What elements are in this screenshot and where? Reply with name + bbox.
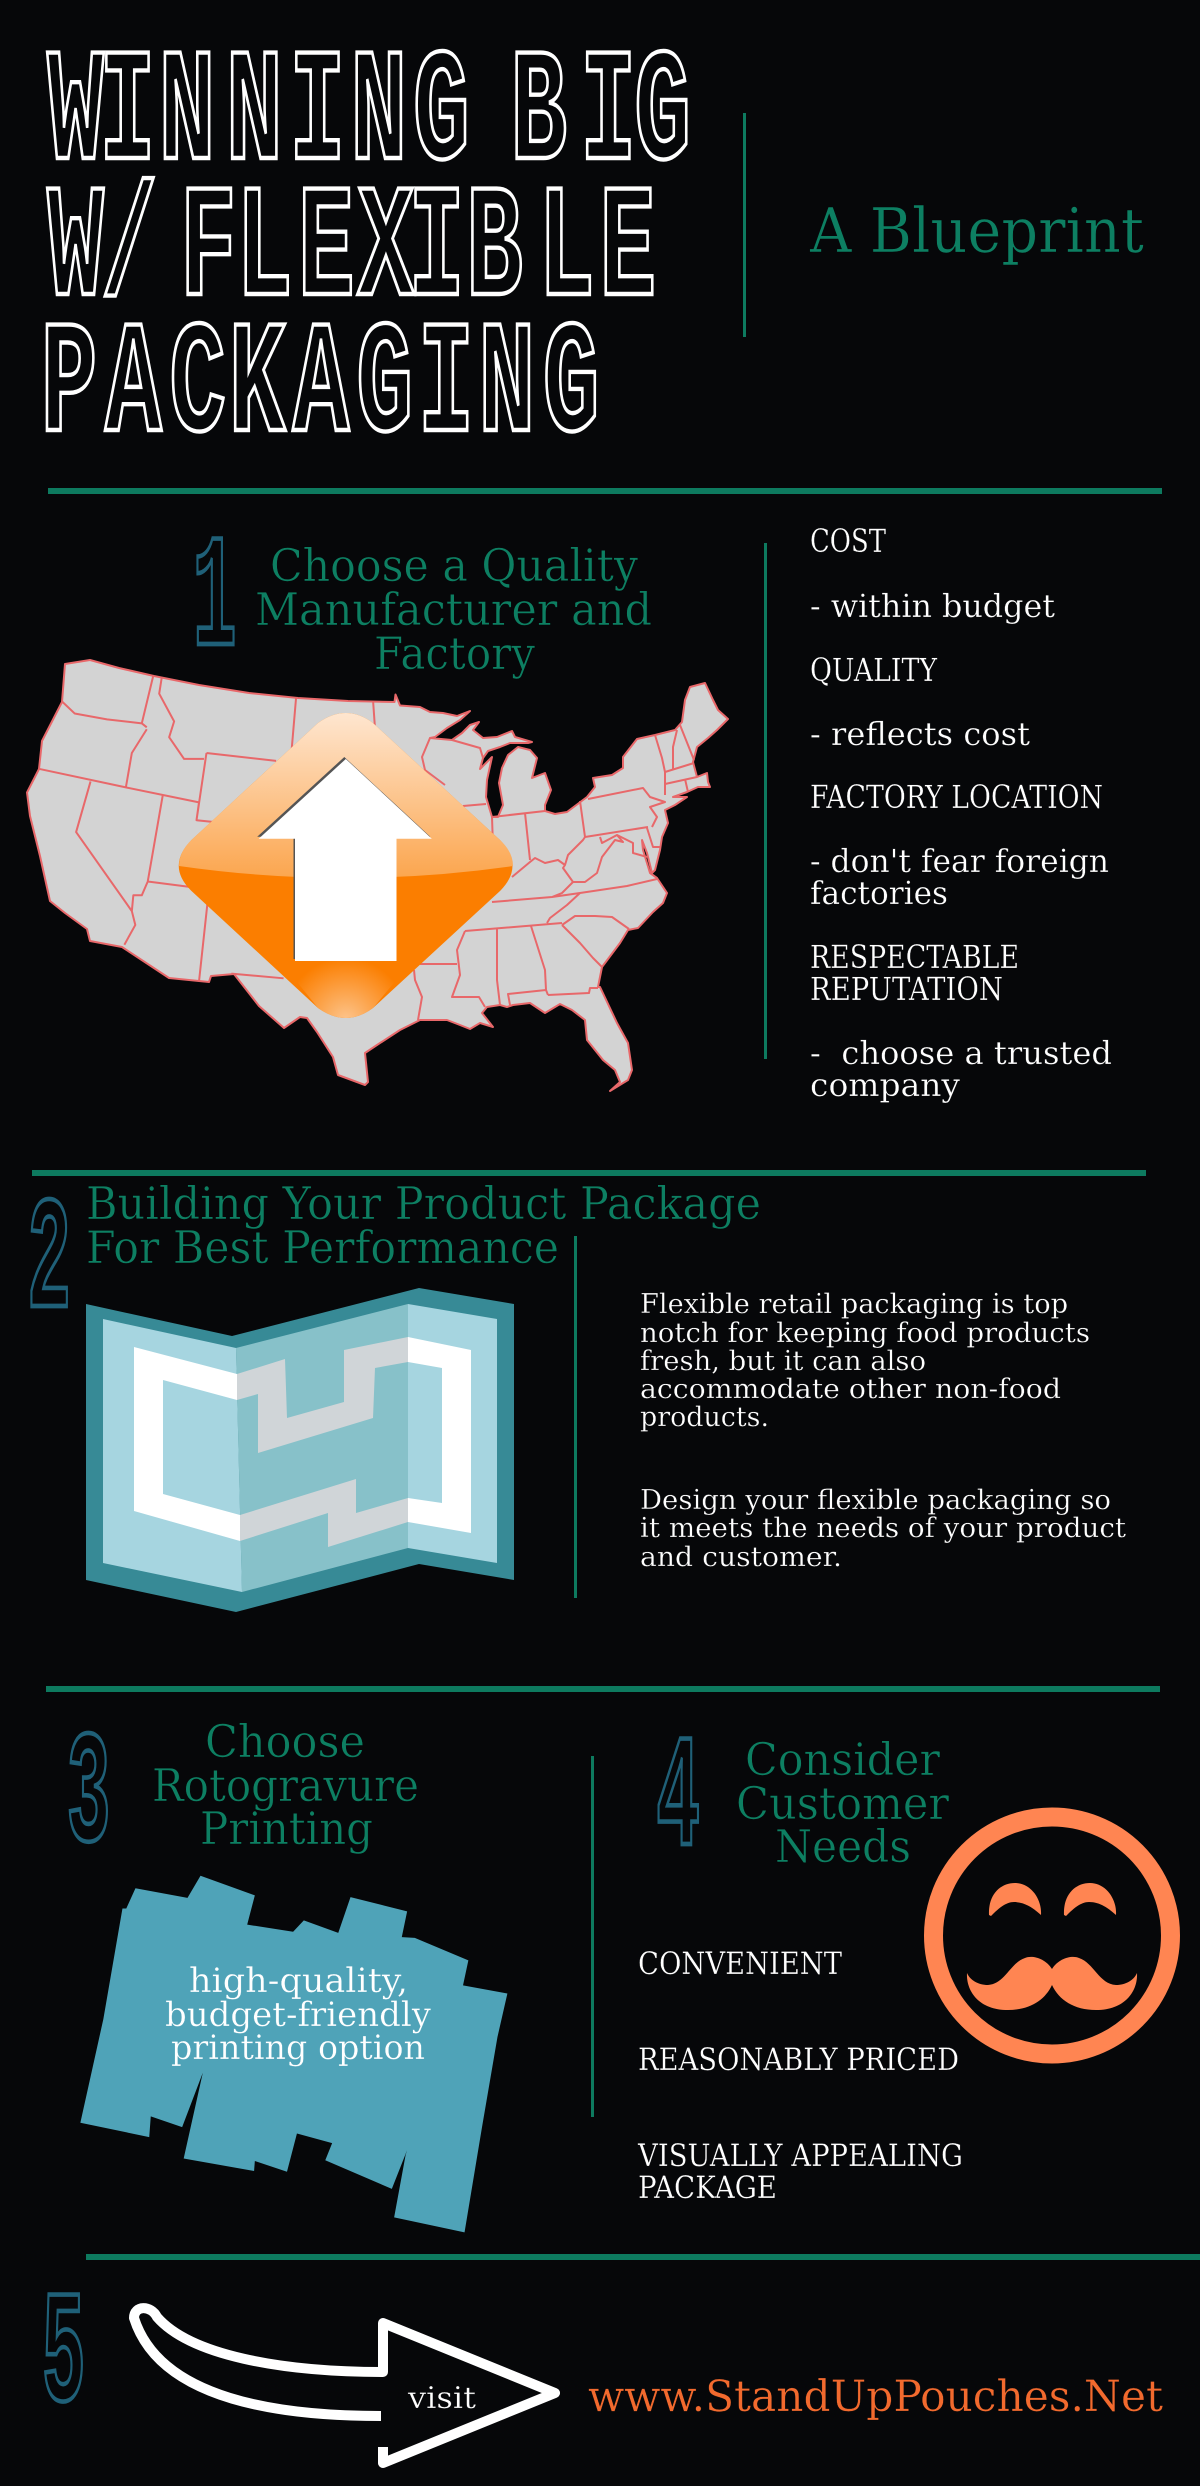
list: customer needs: REASONABLY PRICED bbox=[638, 2042, 959, 2078]
heading: step 1: Manufacturer and bbox=[255, 583, 652, 636]
link text: website: www.StandUpPouches.Net bbox=[588, 2372, 1163, 2422]
heading: step 2: For Best Performance bbox=[86, 1221, 559, 1274]
US map bbox=[27, 660, 728, 1091]
heading: step 4: Consider bbox=[745, 1733, 940, 1786]
icon: mustache face bbox=[934, 1817, 1170, 2054]
heading: step 1: Choose a Quality bbox=[270, 539, 639, 592]
text block: packaging copy bbox=[640, 1289, 1126, 1573]
list: selection criteria: - don't fear foreign bbox=[810, 842, 1109, 880]
panel: step 5 bbox=[42, 2268, 1163, 2463]
panel: step 4 bbox=[637, 1712, 1170, 2206]
text block: packaging copy: Design your flexible packaging so bbox=[640, 1485, 1111, 1516]
number 4: 4 bbox=[656, 1712, 700, 1893]
heading: step 3: Rotogravure bbox=[152, 1759, 419, 1812]
list: customer needs: PACKAGE bbox=[638, 2170, 777, 2206]
list: selection criteria: - reflects cost bbox=[810, 715, 1030, 753]
heading: step 1: Factory bbox=[374, 627, 536, 680]
number 3: 3 bbox=[66, 1708, 111, 1889]
arrow: curved outline bbox=[134, 2308, 555, 2463]
title bbox=[41, 26, 691, 479]
text block: packaging copy: Flexible retail packaging is top bbox=[640, 1289, 1068, 1320]
text block: packaging copy: notch for keeping food products bbox=[640, 1318, 1090, 1349]
number 2: 2 bbox=[27, 1174, 71, 1355]
title: W/ FLEXIBLE bbox=[47, 162, 656, 343]
list: selection criteria: factories bbox=[810, 874, 948, 912]
heading: step 3 bbox=[152, 1715, 419, 1855]
subtitle: A Blueprint bbox=[809, 194, 1144, 267]
heading: step 4: Needs bbox=[775, 1820, 911, 1873]
list: selection criteria: - choose a trusted bbox=[810, 1034, 1112, 1072]
icon: folded package bbox=[86, 1288, 514, 1612]
text block: packaging copy: products. bbox=[640, 1402, 769, 1433]
list: selection criteria bbox=[810, 522, 1112, 1104]
list: selection criteria: QUALITY bbox=[810, 651, 938, 689]
title: WINNING BIG bbox=[47, 26, 691, 207]
heading: step 2: Building Your Product Package bbox=[86, 1177, 761, 1230]
text: printing description: printing option bbox=[171, 2028, 425, 2068]
icon: orange up-arrow diamond bbox=[179, 713, 513, 1018]
list: selection criteria: REPUTATION bbox=[810, 970, 1003, 1008]
list: customer needs bbox=[637, 1946, 963, 2206]
text block: packaging copy: accommodate other non-food bbox=[640, 1374, 1061, 1405]
number 1: 1 bbox=[192, 512, 237, 693]
list: selection criteria: - within budget bbox=[810, 587, 1055, 625]
list: customer needs: CONVENIENT bbox=[638, 1946, 842, 1982]
heading: step 4: Customer bbox=[736, 1777, 949, 1830]
heading: step 3: Printing bbox=[200, 1802, 373, 1855]
text: printing description bbox=[165, 1961, 432, 2068]
text: visit: visit bbox=[407, 2381, 476, 2416]
panel: step 2 bbox=[27, 1174, 1126, 1612]
heading: step 1 bbox=[255, 539, 652, 680]
text: printing description: high-quality, bbox=[189, 1961, 408, 2001]
list: selection criteria: RESPECTABLE bbox=[810, 938, 1019, 976]
list: selection criteria: FACTORY LOCATION bbox=[810, 778, 1103, 816]
title: PACKAGING bbox=[41, 298, 599, 479]
heading: step 3: Choose bbox=[205, 1715, 365, 1768]
list: customer needs: VISUALLY APPEALING bbox=[637, 2138, 963, 2174]
list: selection criteria: company bbox=[810, 1066, 960, 1104]
panel: step 1 bbox=[27, 512, 1112, 1104]
text block: packaging copy: it meets the needs of your product bbox=[640, 1513, 1126, 1544]
list: selection criteria: COST bbox=[810, 522, 887, 560]
brush stroke shape bbox=[80, 1876, 507, 2232]
heading: step 4 bbox=[736, 1733, 949, 1873]
text block: packaging copy: fresh, but it can also bbox=[640, 1346, 926, 1377]
text: printing description: budget-friendly bbox=[165, 1995, 432, 2035]
heading: step 2 bbox=[86, 1177, 761, 1274]
panel: step 3 bbox=[66, 1708, 507, 2232]
number 5: 5 bbox=[42, 2268, 86, 2449]
text block: packaging copy: and customer. bbox=[640, 1542, 842, 1573]
